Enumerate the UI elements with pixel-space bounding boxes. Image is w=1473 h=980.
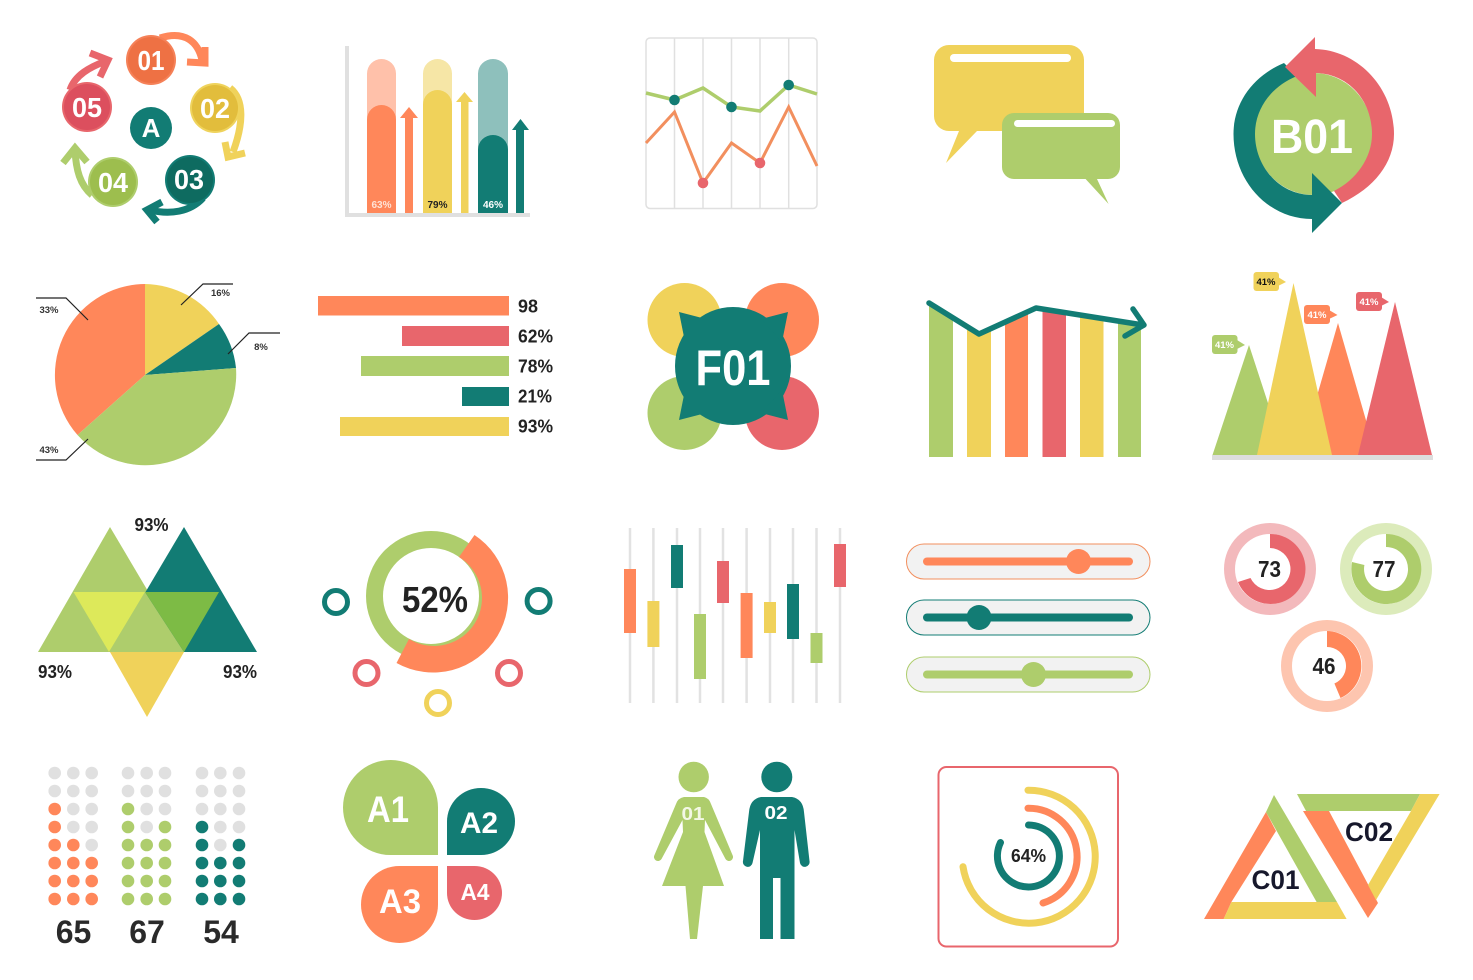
donut 46: 46 [1312, 653, 1336, 679]
triangle C01: C01 [1252, 865, 1300, 895]
panel: four petals [343, 760, 515, 943]
small rings [324, 590, 550, 714]
arrow 05 [70, 53, 108, 90]
orange slider [906, 544, 1150, 579]
yellow bubble [934, 45, 1084, 163]
teal badge [675, 307, 791, 425]
bar 46% [478, 59, 508, 213]
bar 98: 98 [518, 296, 538, 316]
panel: radial progress in frame [938, 767, 1118, 946]
counter values: 65 [56, 914, 91, 950]
counter values: 67 [129, 914, 165, 950]
arrow 02 [225, 88, 245, 157]
panel: overlapping triangles [38, 515, 257, 717]
circle 05: 05 [72, 92, 102, 123]
yellow slice [145, 284, 219, 375]
labels: 93% [223, 662, 257, 682]
circle 05 [62, 82, 112, 132]
arrow 01 [160, 35, 205, 63]
circle 04: 04 [98, 167, 128, 198]
petal A1: A1 [367, 789, 409, 830]
green slice [78, 368, 236, 465]
bar 21% [462, 386, 552, 406]
orange dots [48, 803, 98, 905]
grid frame [646, 38, 817, 208]
woman figure [654, 762, 733, 939]
arrow 03 [147, 198, 203, 222]
counter values [56, 914, 239, 950]
bar 21%: 21% [518, 386, 552, 406]
labels [38, 515, 257, 682]
panel: capsule bar chart with arrows [345, 46, 530, 217]
center triangle [109, 592, 184, 652]
circle 03 [165, 155, 215, 205]
teal arc [997, 825, 1059, 887]
red arrow [1285, 37, 1394, 203]
panel: pie chart [36, 284, 280, 465]
bar 78% [361, 356, 553, 376]
value: 52% [402, 579, 468, 620]
callout 43%: 43% [39, 445, 59, 456]
circle 04 [88, 157, 138, 207]
green bubble [1002, 113, 1120, 204]
circle 01: 01 [138, 45, 164, 76]
petal A3: A3 [379, 883, 421, 921]
panel: people figures [654, 762, 810, 939]
wicks [630, 528, 840, 703]
callout 33% [36, 298, 88, 320]
yellow arc [963, 790, 1095, 923]
bar 79% [423, 59, 452, 213]
red markers [698, 158, 765, 188]
bar 93%: 93% [518, 416, 553, 436]
panel: horizontal bars [318, 296, 553, 436]
red frame [938, 767, 1118, 946]
circle 02: 02 [200, 93, 230, 124]
candles [624, 544, 846, 679]
panel: sliders [906, 544, 1150, 692]
labels: 93% [134, 515, 168, 535]
mid green overlap [145, 592, 219, 652]
gray dots [48, 767, 245, 851]
tag green [1212, 335, 1245, 354]
tag red [1356, 292, 1389, 311]
donut 77 [1340, 523, 1432, 615]
panel: 52% donut [324, 535, 550, 714]
label F01: F01 [696, 340, 770, 396]
tag red: 41% [1359, 297, 1379, 308]
tag yellow: 41% [1256, 277, 1276, 288]
callout 8%: 8% [254, 342, 268, 353]
arrow yellow [456, 92, 473, 213]
value: 64% [1011, 846, 1046, 866]
circle 03: 03 [174, 164, 204, 195]
arrow 04 [63, 148, 92, 195]
bar 62%: 62% [518, 326, 553, 346]
tag green: 41% [1215, 340, 1235, 351]
yellow triangle [110, 652, 184, 717]
callout 33%: 33% [39, 305, 59, 316]
tag orange: 41% [1307, 310, 1327, 321]
panel: candlestick chart [624, 528, 846, 703]
bar 62% [402, 326, 553, 346]
orange arc [1028, 808, 1077, 903]
donut 77: 77 [1372, 556, 1396, 582]
callout 16%: 16% [211, 288, 231, 299]
labels: 93% [38, 662, 72, 682]
panel: small progress donuts [1224, 523, 1432, 712]
trend arrow [929, 303, 1144, 336]
bar 79%: 79% [427, 200, 448, 211]
triangle C01 [1204, 795, 1347, 919]
columns [929, 303, 1141, 457]
petal A2 [447, 788, 515, 855]
arrow teal [512, 119, 529, 213]
panel: dot matrix counters [48, 767, 245, 950]
green slider [906, 657, 1150, 692]
green center [1254, 73, 1372, 195]
petal A3 [361, 866, 438, 943]
petal A1 [343, 760, 438, 855]
panel: linked triangles [1204, 794, 1440, 919]
orange peak [1300, 323, 1376, 455]
circle 02 [190, 83, 240, 133]
lime overlap [74, 592, 145, 652]
arrow orange [400, 107, 418, 213]
counter values: 54 [203, 914, 239, 950]
green ring [374, 540, 488, 652]
green line [646, 85, 817, 111]
teal slider [906, 600, 1150, 635]
panel: F01 clover [648, 283, 819, 450]
bar 63% [367, 59, 396, 213]
tag orange [1304, 305, 1338, 324]
green triangle [38, 527, 184, 652]
green peak [1212, 345, 1285, 455]
orange arc [396, 535, 508, 673]
center circle A [130, 107, 172, 149]
petal A4: A4 [460, 879, 490, 905]
petal A2: A2 [460, 807, 498, 840]
panel: speech bubbles [934, 45, 1120, 204]
label B01: B01 [1271, 111, 1353, 164]
red peak [1358, 302, 1432, 455]
panel: mountain chart [1212, 272, 1433, 460]
teal dots [196, 821, 245, 905]
teal slice [145, 324, 236, 375]
callout 8% [228, 333, 280, 354]
green dots [122, 803, 171, 905]
orange slice [55, 284, 145, 435]
donut 73 [1224, 523, 1316, 615]
circle 01 [126, 35, 176, 85]
panel: B01 cycle [1234, 37, 1394, 233]
teal triangle [110, 527, 257, 652]
triangle C02 [1297, 794, 1440, 918]
bar 93% [340, 416, 553, 436]
petal A4 [447, 866, 502, 920]
callout 43% [36, 439, 88, 460]
panel: line chart [646, 38, 817, 208]
bar 46%: 46% [483, 200, 503, 211]
man figure [743, 762, 810, 939]
triangle C02: C02 [1345, 817, 1393, 847]
callout 16% [181, 284, 233, 305]
panel: column chart with trend arrow [929, 303, 1144, 457]
bar 78%: 78% [518, 356, 553, 376]
tag yellow [1254, 272, 1286, 291]
teal markers [669, 80, 794, 112]
bar 98 [318, 296, 538, 316]
panel: numbered circular cycle [62, 35, 245, 222]
orange line [646, 107, 817, 183]
donut 46 [1281, 620, 1373, 712]
man figure: 02 [764, 803, 788, 823]
donut 73: 73 [1258, 556, 1281, 582]
baseline [1212, 455, 1433, 460]
center circle A: A [142, 113, 161, 143]
bar 63%: 63% [371, 200, 392, 211]
woman figure: 01 [682, 804, 704, 824]
axes [345, 46, 530, 217]
teal arrow [1234, 63, 1342, 233]
yellow peak [1257, 283, 1332, 455]
four circles [648, 283, 819, 450]
